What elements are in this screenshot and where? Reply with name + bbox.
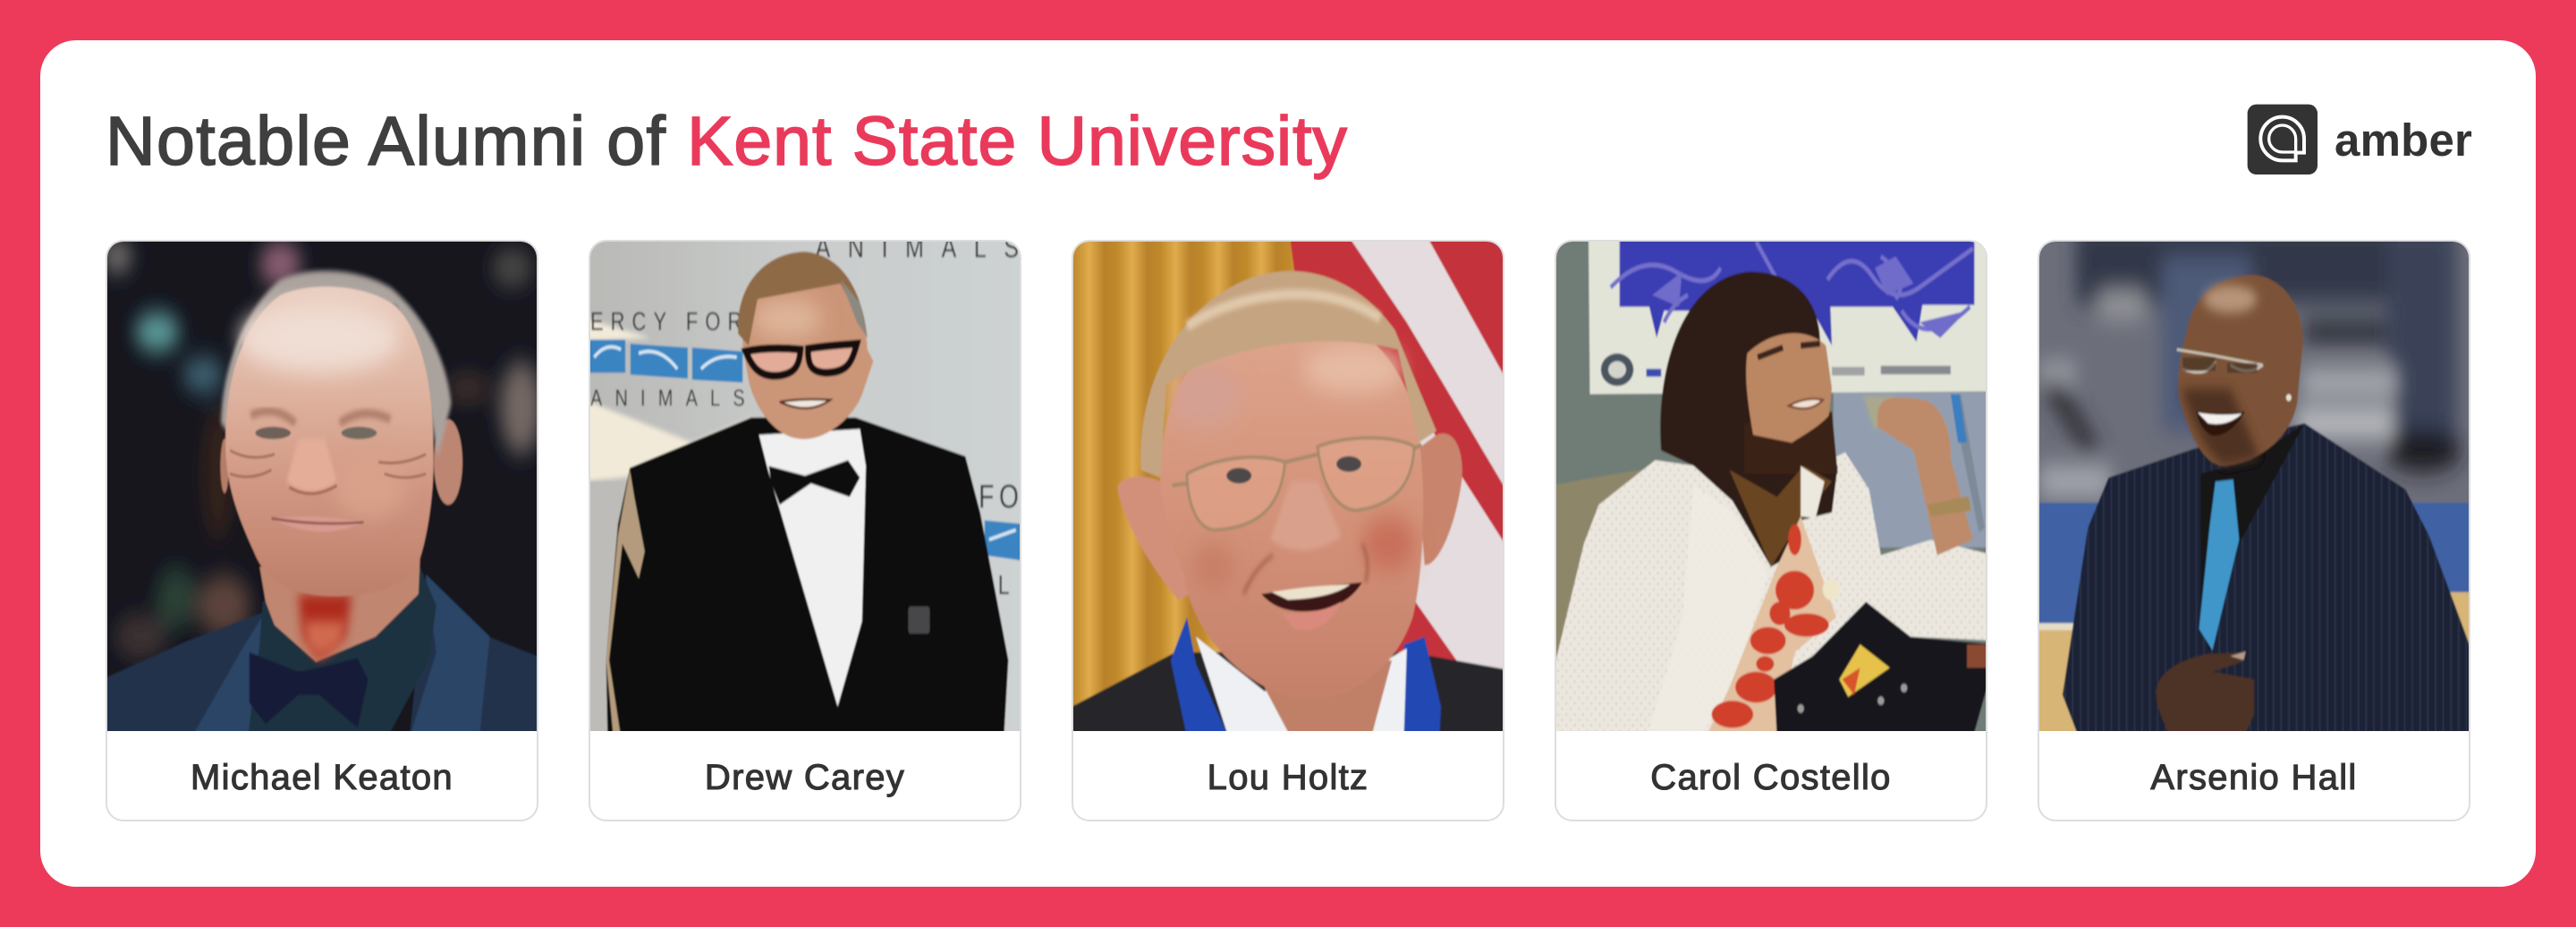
hair (1140, 271, 1436, 478)
photo: Carol Costello (1556, 242, 1986, 731)
name label: Arsenio Hall (2150, 758, 2358, 797)
nose (1270, 481, 1342, 550)
hair (738, 251, 868, 345)
ears (1117, 477, 1190, 600)
shirt collar (1196, 637, 1407, 737)
blue tie (2199, 480, 2239, 651)
amber logo (2247, 104, 2472, 174)
head (742, 266, 873, 439)
backdrop text (590, 232, 1019, 600)
poster logos (1601, 353, 1633, 386)
card: Carol Costello (1555, 240, 1987, 821)
black bag (1774, 602, 1994, 737)
icon: amber mark (2247, 104, 2318, 174)
face (1746, 333, 1832, 443)
blue logos (585, 340, 1025, 561)
photo: Arsenio Hall (2039, 242, 2469, 731)
name label: Michael Keaton (191, 758, 453, 797)
backdrop text: ANIMALS (590, 385, 745, 411)
backdrop text: ERCY FOR (590, 308, 741, 336)
jacket (1551, 453, 1994, 737)
backdrop text: L (998, 570, 1010, 600)
eyes (1226, 468, 1251, 483)
hand (2156, 652, 2254, 737)
backdrop text: FO (979, 478, 1019, 515)
face (225, 286, 434, 596)
blue ribbon (1171, 617, 1441, 737)
bow tie (250, 652, 368, 728)
arm and hand (1877, 397, 1973, 555)
title: Notable Alumni of Kent State University (106, 103, 1348, 180)
ears (434, 420, 462, 505)
smile (1261, 583, 1362, 611)
card: Drew Carey (589, 240, 1021, 821)
name label: Carol Costello (1650, 758, 1892, 797)
name label: Drew Carey (705, 758, 905, 797)
blouse (1706, 516, 1836, 737)
head (2178, 275, 2303, 466)
face (1160, 307, 1423, 700)
shirt (759, 429, 866, 707)
smile (780, 399, 830, 408)
card: Lou Holtz (1072, 240, 1504, 821)
card: Arsenio Hall (2038, 240, 2470, 821)
photo: Drew Carey (590, 242, 1020, 731)
name label: Lou Holtz (1208, 758, 1368, 797)
photo: Michael Keaton (107, 242, 537, 731)
glasses (2177, 350, 2263, 372)
smile (2196, 411, 2245, 436)
jacket (1068, 652, 1508, 737)
card: Michael Keaton (106, 240, 538, 821)
logo wordmark: amber (2334, 115, 2472, 166)
glasses (1187, 438, 1414, 530)
photo: Lou Holtz (1073, 242, 1503, 731)
dark shirt (2200, 423, 2304, 652)
neck (259, 559, 420, 662)
hair (1660, 272, 1838, 567)
jacket (606, 418, 1008, 737)
flag (1288, 221, 1520, 737)
poster (1589, 221, 1996, 394)
jacket (2063, 423, 2474, 737)
glasses (746, 344, 857, 376)
hair (221, 271, 451, 458)
stand pole (1951, 394, 1985, 532)
bow tie (769, 460, 860, 505)
blue wall (2022, 503, 2486, 623)
suit (102, 574, 542, 737)
tan floor (2022, 629, 2129, 737)
